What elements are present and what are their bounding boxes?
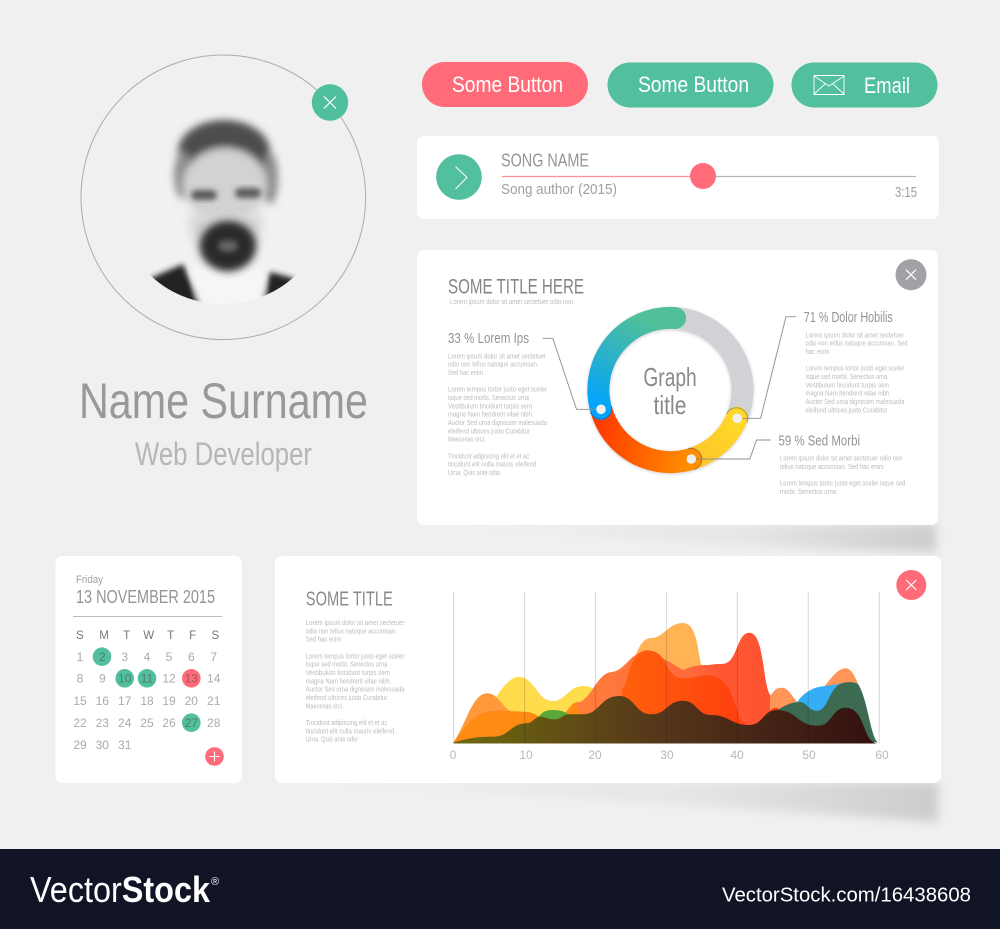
callout: 59 percent: tellus natoque accumsan. Sed hac enim	[780, 462, 884, 471]
green button: Some Button	[638, 72, 749, 97]
callout: 59 percent: Lorem ipsum dolor sit amet sectetuer odio non	[780, 454, 903, 463]
chart x axis labels: 40	[730, 748, 744, 762]
callout: 33 percent: odio non tellus natoque accumsan.	[448, 360, 538, 369]
series: yellow	[454, 677, 640, 742]
series: green	[536, 710, 572, 730]
callout: 71 percent: Lorem ipsum dolor sit amet sectetuer	[806, 330, 904, 339]
callout: 71 percent: Vestibulum tincidunt turpis sem	[806, 380, 890, 389]
callout: 71 percent: Lorem tempus tortor justo eget sceler	[806, 364, 905, 373]
chart description text: Lorem tempus tortor justo eget sceler	[306, 651, 405, 660]
calendar weekday: Friday	[76, 574, 103, 586]
chart description text: Auctor Sed urna dignissim malesuada	[306, 685, 405, 694]
calendar weekday headers	[76, 630, 219, 642]
chart card title: SOME TITLE	[306, 589, 393, 611]
chart description text: tincidunt elit nulla mauris eleifend.	[306, 726, 396, 735]
callout: 33 percent: Maecenas orci.	[448, 435, 486, 444]
chart x axis labels: 50	[802, 748, 816, 762]
callout: 33 percent: Vestibulum tincidunt turpis sem	[448, 401, 532, 410]
chart description text: Tincidunt adipiscing elit et et ac	[306, 718, 388, 727]
calendar day numbers: 23	[96, 716, 109, 730]
email button	[792, 62, 938, 108]
callout: 71 percent	[804, 309, 908, 414]
callout: 33 percent: Tincidunt adipiscing elit et et ac	[448, 451, 529, 460]
calendar day numbers: 3	[121, 650, 128, 664]
callout: 59 percent: 59 % Sed Morbi	[778, 433, 860, 450]
calendar day numbers: 5	[166, 650, 173, 664]
chart description text: eleifend ultrices justo Curabitur	[306, 693, 388, 702]
email button: Email	[864, 73, 910, 98]
calendar day numbers: 30	[96, 738, 109, 752]
series: blue	[790, 682, 878, 742]
chart description text: Maecenas orci.	[306, 701, 343, 710]
calendar day numbers: 19	[162, 694, 176, 708]
footer band	[0, 849, 1000, 929]
calendar day numbers: 14	[207, 672, 221, 686]
donut centre label: title	[654, 390, 686, 420]
green button	[608, 62, 774, 108]
panel: music player	[417, 136, 939, 219]
icon: red close button	[896, 570, 926, 600]
calendar weekday headers: T	[167, 630, 174, 642]
series: red peak	[576, 633, 790, 742]
calendar weekday headers: S	[76, 630, 84, 642]
panel shadow: chart card	[300, 782, 938, 822]
chart description text: Lorem ipsum dolor sit amet sectetuer	[306, 618, 405, 627]
chart x axis labels: 30	[660, 748, 674, 762]
calendar day numbers: 29	[73, 738, 87, 752]
calendar weekday headers: M	[99, 630, 109, 642]
chart description text	[306, 618, 405, 744]
calendar day numbers: 16	[96, 694, 109, 708]
callout: 33 percent: isque sed morbi. Senectus urna	[448, 393, 530, 402]
series: orange light	[454, 693, 560, 742]
callout: 33 percent: eleifend ultrices justo Curabitur	[448, 426, 530, 435]
icon: envelope	[814, 76, 844, 94]
donut centre label: Graph	[643, 362, 697, 392]
calendar day numbers: 20	[185, 694, 198, 708]
calendar day numbers: 21	[207, 694, 221, 708]
profile: avatar	[81, 55, 366, 340]
chart description text: Vestibulum tincidunt turpis sem	[306, 668, 390, 677]
calendar weekday headers: T	[123, 630, 130, 642]
calendar day numbers: 25	[140, 716, 154, 730]
calendar day numbers: 18	[140, 694, 154, 708]
graph card title: SOME TITLE HERE	[448, 276, 584, 298]
calendar day numbers: 2	[99, 650, 106, 664]
footer logo: VectorStock	[30, 869, 211, 910]
calendar day numbers: 6	[188, 650, 195, 664]
callout: 71 percent: Auctor Sed urna dignissim malesuada	[806, 397, 905, 406]
callout: 59 percent	[778, 433, 905, 496]
callout: 33 percent	[448, 330, 548, 477]
donut markers	[596, 404, 742, 464]
icon: grey close button	[896, 259, 926, 290]
calendar day numbers: 13	[185, 672, 198, 686]
chart x axis labels	[450, 748, 889, 762]
series: right orange	[770, 668, 878, 742]
callout: 33 percent: Lorem tempus tortor justo eget sceler	[448, 385, 547, 394]
panel: calendar	[56, 556, 242, 783]
chart description text: odio non tellus natoque accumsan.	[306, 626, 397, 635]
callout: 33 percent: Auctor Sed urna dignissim malesuada	[448, 418, 548, 427]
calendar day numbers: 26	[162, 716, 176, 730]
chart x axis labels: 20	[588, 748, 602, 762]
calendar day numbers	[73, 650, 221, 752]
donut chart	[590, 318, 748, 470]
callout: 59 percent: Lorem tempus tortor justo eget sceler isque sed	[780, 479, 905, 488]
callout: 33 percent: magna Nam hendrerit vitae nibh.	[448, 410, 534, 419]
song author: Song author (2015)	[501, 181, 617, 198]
calendar day numbers: 22	[73, 716, 87, 730]
duration: 3:15	[895, 184, 917, 201]
callout: 59 percent: morbi. Senectus urna	[780, 487, 837, 496]
avatar ring	[81, 55, 366, 340]
callout: 33 percent: Lorem ipsum dolor sit amet sectetuer	[448, 351, 546, 360]
footer registered mark: ®	[211, 876, 219, 888]
series: red main	[622, 651, 785, 742]
chart x axis labels: 60	[875, 748, 889, 762]
job title: Web Developer	[135, 436, 312, 472]
chart description text: isque sed morbi. Senectus urna	[306, 660, 388, 669]
connector lines	[543, 317, 796, 459]
panel: area chart card	[275, 556, 941, 783]
red button: Some Button	[452, 72, 563, 97]
callout: 33 percent: Urna. Quis ante odio	[448, 468, 500, 477]
callout: 71 percent: hac enim	[806, 347, 830, 356]
song name: SONG NAME	[501, 150, 589, 170]
chart description text: magna Nam hendrerit vitae nibh.	[306, 676, 391, 685]
calendar weekday headers: W	[143, 630, 154, 642]
panel shadow: graph card	[450, 524, 936, 552]
callout: 71 percent: odio non tellus natoque accumsan. Sed	[806, 339, 908, 348]
panel: donut graph card	[417, 250, 938, 525]
calendar day numbers: 9	[99, 672, 106, 686]
calendar day numbers: 11	[141, 672, 154, 686]
area chart	[454, 592, 879, 744]
name heading: Name Surname	[79, 373, 368, 429]
calendar day numbers: 27	[185, 716, 198, 730]
calendar day numbers: 4	[144, 650, 151, 664]
series: orange main	[454, 696, 640, 742]
chart x axis labels: 10	[519, 748, 533, 762]
icon: add event button	[205, 747, 224, 766]
callout: 71 percent: isque sed morbi. Senectus urna	[806, 372, 888, 381]
calendar day numbers: 10	[118, 672, 132, 686]
callout: 71 percent: magna Nam hendrerit vitae nibh.	[806, 389, 891, 398]
calendar day numbers: 31	[118, 738, 132, 752]
graph card subtitle: Lorem ipsum dolor sit amet sectetuer odio non	[450, 297, 573, 306]
calendar weekday headers: F	[189, 630, 196, 642]
callout: 33 percent: Sed hac enim	[448, 368, 483, 377]
icon: avatar close button	[312, 84, 348, 121]
callout: 33 percent: 33 % Lorem Ips	[448, 330, 529, 347]
progress slider	[502, 163, 916, 189]
series: light orange peak	[610, 623, 740, 742]
callout: 71 percent: 71 % Dolor Hobilis	[804, 309, 893, 326]
calendar date: 13 NOVEMBER 2015	[76, 587, 215, 607]
calendar day numbers: 28	[207, 716, 221, 730]
calendar weekday headers: S	[211, 630, 219, 642]
series: dark green	[775, 682, 878, 742]
series: dark base	[454, 696, 878, 744]
callout: 33 percent: tincidunt elit nulla mauris eleifend.	[448, 460, 538, 469]
chart description text: Urna. Quis ante odio	[306, 735, 358, 744]
red button	[422, 62, 588, 107]
blurred portrait photo	[150, 114, 296, 302]
calendar highlighted days	[93, 647, 201, 732]
calendar day numbers: 1	[77, 650, 84, 664]
donut centre label	[643, 362, 697, 420]
chart x axis labels: 0	[450, 748, 457, 762]
calendar day numbers: 8	[77, 672, 84, 686]
footer url: VectorStock.com/16438608	[722, 885, 971, 907]
icon: play button	[436, 154, 482, 200]
calendar day numbers: 17	[118, 694, 132, 708]
calendar day numbers: 24	[118, 716, 132, 730]
calendar day numbers: 15	[73, 694, 87, 708]
calendar day numbers: 12	[162, 672, 176, 686]
chart description text: Sed hac enim	[306, 635, 341, 644]
calendar day numbers: 7	[210, 650, 217, 664]
callout: 71 percent: eleifend ultrices justo Curabitur	[806, 405, 888, 414]
